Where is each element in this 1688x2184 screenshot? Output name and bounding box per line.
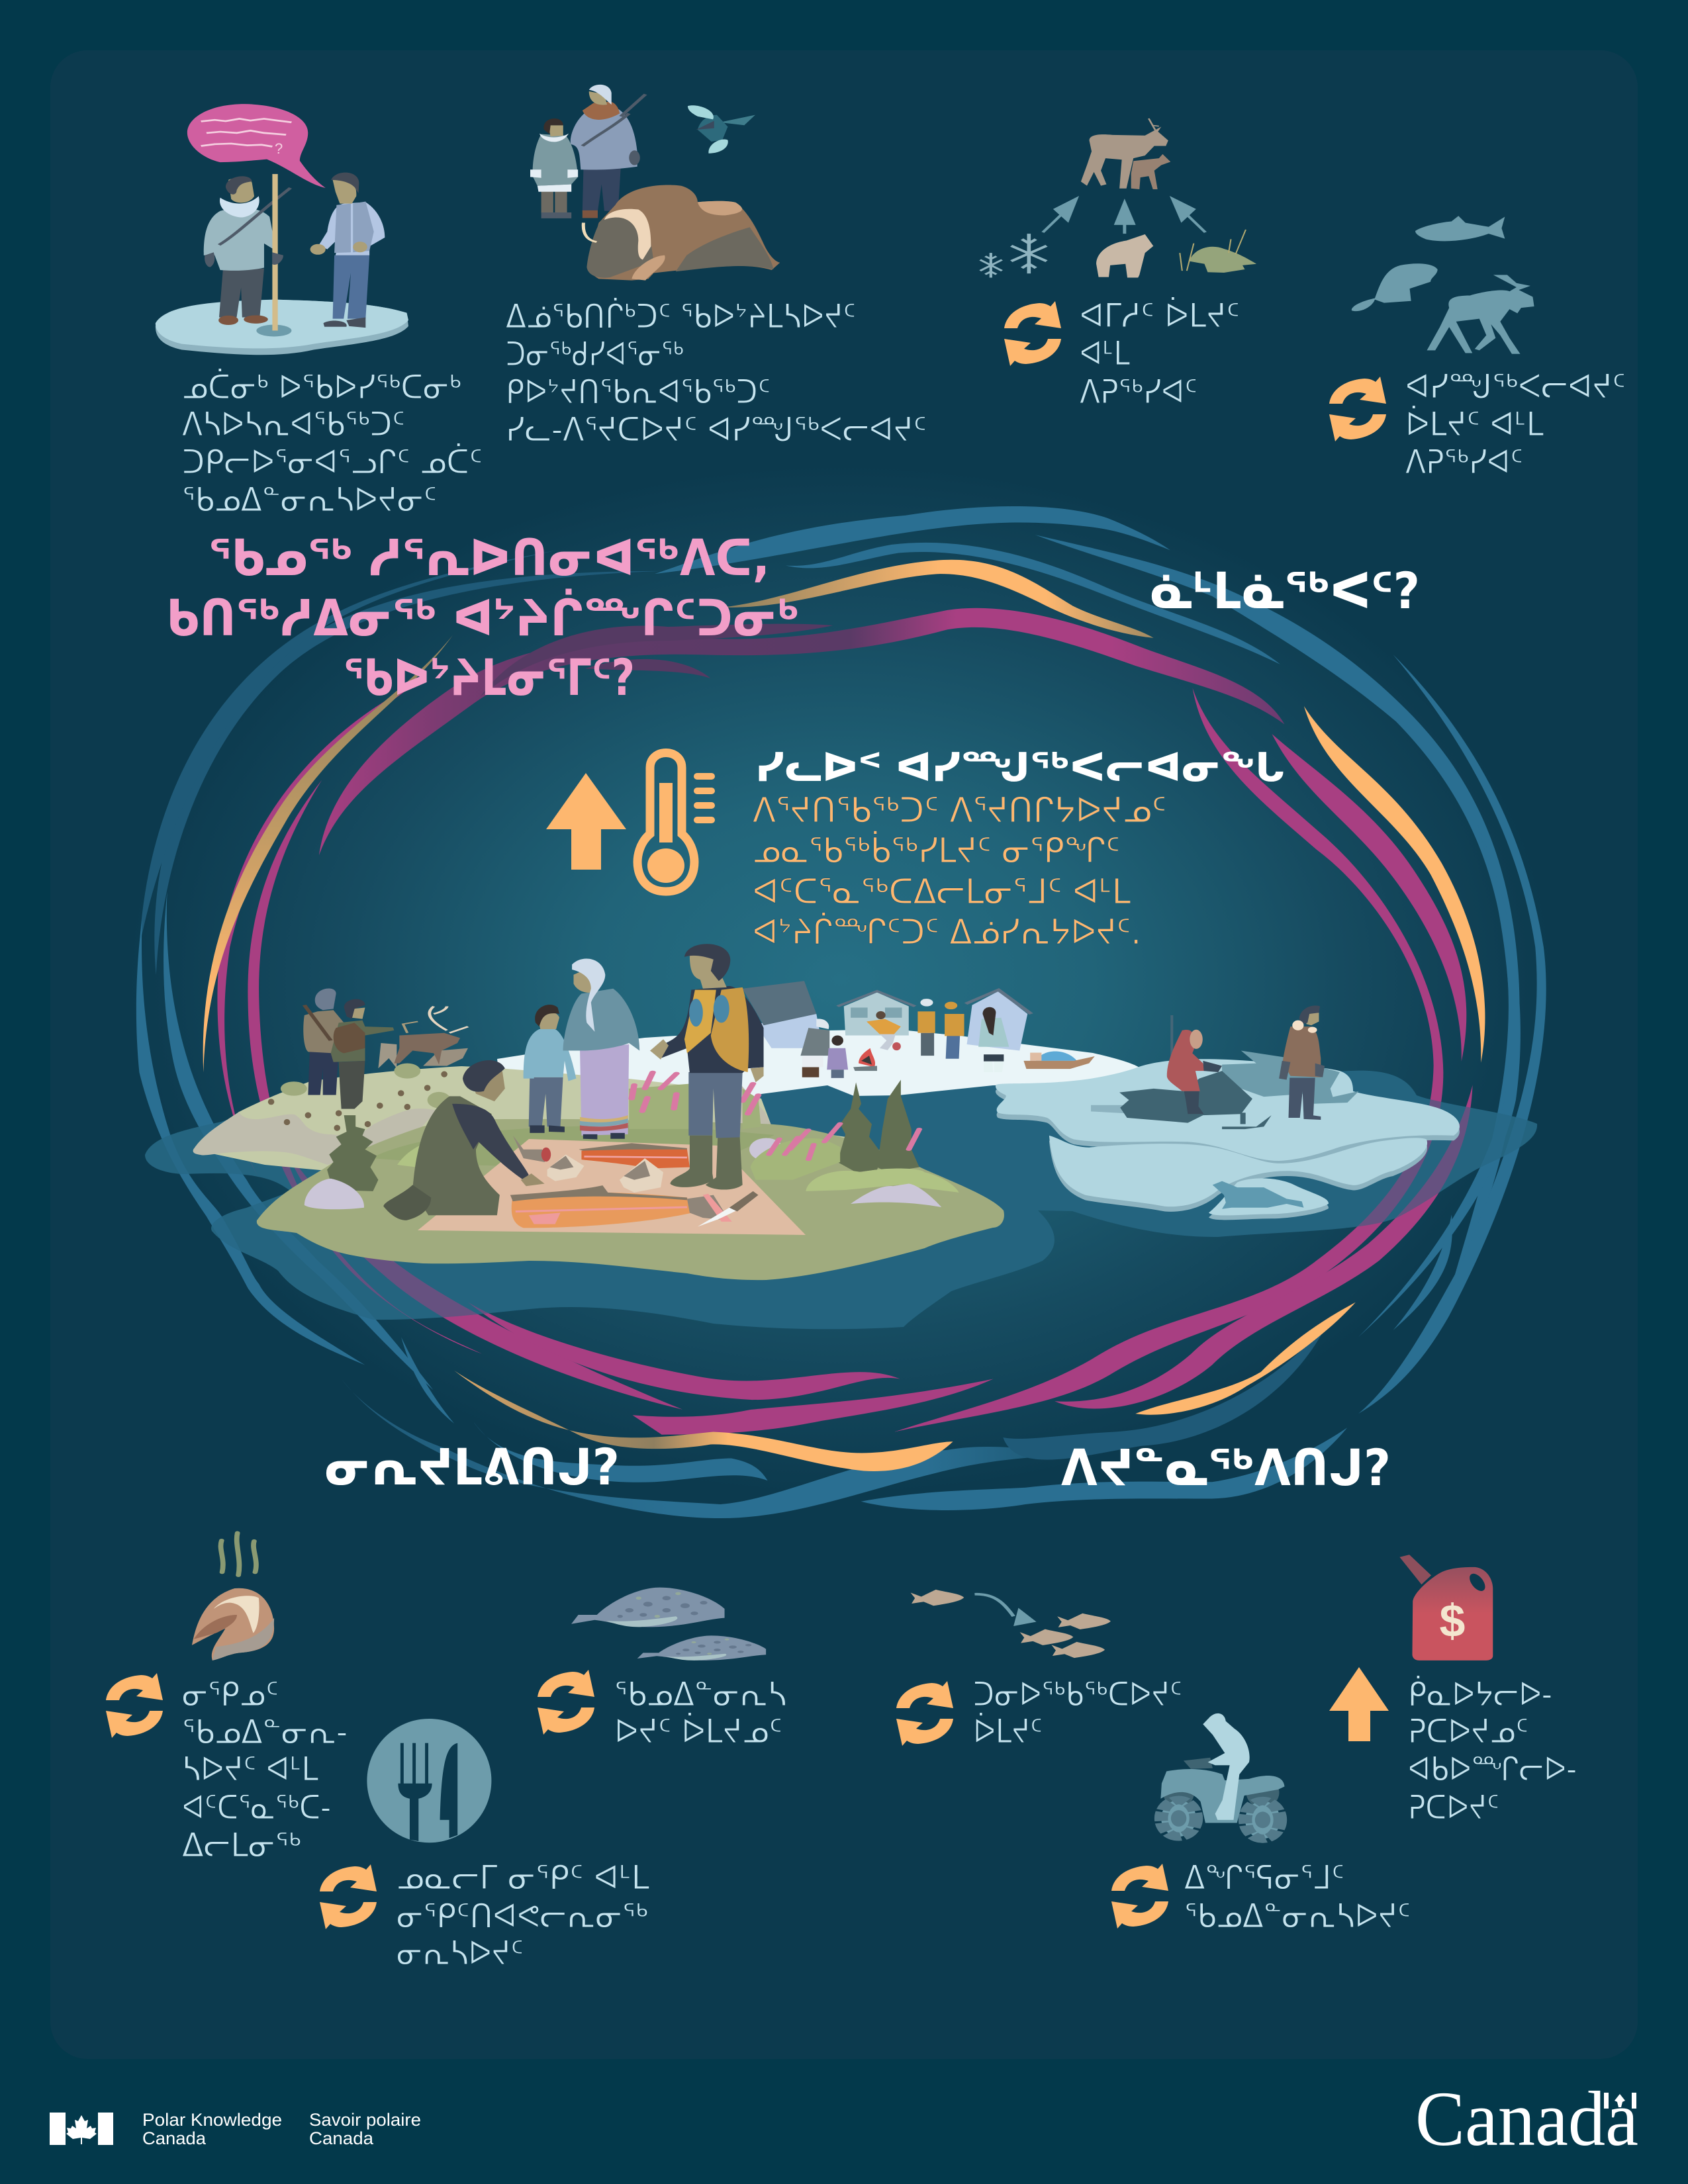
tree left (327, 1115, 378, 1191)
water (145, 1071, 1537, 1329)
text: food quality and safety: ᓂᕿᓄᑦ (182, 1675, 279, 1713)
wolf (1096, 234, 1153, 277)
text: food quality and safety: ᐃᓕᒪᓂᖅ (182, 1826, 301, 1864)
snow bank (497, 1029, 1142, 1112)
text: Inuit knowledge (506, 296, 927, 449)
icon: cycle (538, 1670, 594, 1735)
tracks and tufts (268, 1071, 447, 1131)
flag symbol (50, 2113, 113, 2145)
footer: Polar Knowledge signature (50, 2110, 421, 2148)
text: travel: ᖃᓄᐃᓐᓂᕆᓴᐅᔪᑦ (1184, 1897, 1411, 1935)
light green bushes (806, 1168, 959, 1193)
icon: cycle (1329, 377, 1386, 441)
text: Inuit knowledge: ᓯᓚ-ᐱᕐᔪᑕᐅᔪᑦ ᐊᓯᙳᖅᐸᓕᐊᔪᑦ (506, 410, 927, 449)
text: local food: ᓄᓇᓕᒥ ᓂᕿᑦ ᐊᒻᒪ (397, 1858, 649, 1897)
panel: access (896, 1555, 1577, 1935)
bushes back (281, 1064, 451, 1108)
text: many animals and plants (1080, 295, 1240, 411)
text: Inuit knowledge: ᑭᐅᔾᔪᑎᖃᕆᐊᖃᖅᑐᑦ (506, 373, 771, 411)
heading: pink question: ᑲᑎᖅᓱᐃᓂᖅ ᐊᔾᔨᒌᙱᑦᑐᓂᒃ (166, 588, 800, 647)
text: local food (397, 1858, 649, 1972)
snowflakes (980, 234, 1047, 277)
icon: cooked meat with steam (192, 1533, 274, 1661)
back land (193, 1066, 854, 1171)
dollar sign: $ (1440, 1595, 1465, 1647)
icon: plate with fork and knife (367, 1719, 491, 1843)
text: Inuit knowledge: ᑐᓂᖅᑯᓯᐊᕐᓂᖅ (506, 335, 684, 373)
question mark in bubble: ? (275, 140, 283, 157)
right trees (837, 1080, 919, 1172)
village houses (743, 981, 1031, 1051)
text: costs: ᕈᑕᐅᔪᑦ (1408, 1788, 1499, 1827)
ice pan (156, 300, 408, 355)
text: changing animals and plants: ᐊᓯᙳᖅᐸᓕᐊᔪᑦ (1405, 367, 1626, 406)
signature text: Canada (142, 2128, 207, 2148)
lighter meadow (371, 1125, 774, 1171)
rock left (305, 1179, 364, 1209)
salmon silhouette (1415, 216, 1505, 241)
text: climate change body: ᐊᔾᔨᒌᙱᑦᑐᑦ ᐃᓅᓯᕆᔭᐅᔪᑦ. (753, 911, 1141, 952)
text: many animals and plants: ᐱᕈᖅᓯᐊᑦ (1080, 373, 1197, 411)
icon: cycle (320, 1864, 377, 1929)
heading: pink question (166, 528, 800, 707)
text: migrating animals (973, 1675, 1182, 1751)
icon: fuel can (1399, 1555, 1493, 1661)
panel: new knowledge, ice scene (156, 85, 927, 519)
panel: food quality (106, 1533, 786, 1972)
heading: do you want it: ᓂᕆᔪᒪᕕᑎᒍ? (324, 1437, 620, 1496)
heading: can you get it: ᐱᔪᓐᓇᖅᐱᑎᒍ? (1061, 1438, 1391, 1497)
icon: cycle (896, 1681, 953, 1746)
text: travel (1184, 1858, 1411, 1935)
text: food quality and safety: ᓴᐅᔪᑦ ᐊᒻᒪ (182, 1750, 318, 1788)
signature text: Polar Knowledge (142, 2110, 282, 2130)
main island (257, 1119, 1004, 1280)
text: migrating animals: ᑐᓂᐅᖅᑲᖅᑕᐅᔪᑦ (973, 1675, 1182, 1713)
signature text: Savoir polaire (309, 2110, 421, 2130)
rock behind fireweed (749, 1138, 783, 1161)
heading: is it safe: ᓈᒻᒪᓈᖅᐸᑦ? (1150, 561, 1420, 620)
text: migrating animals: ᐆᒪᔪᑦ (973, 1711, 1043, 1751)
icon: up arrow (1329, 1667, 1389, 1741)
icon: ATV rider (1160, 1713, 1285, 1839)
bright grass patch (397, 1138, 450, 1168)
icon: thermometer (637, 753, 715, 891)
text: changing animals and plants (1405, 367, 1626, 481)
signature text (142, 2110, 421, 2148)
text: food quality and safety: ᖃᓄᐃᓐᓂᕆ- (182, 1713, 348, 1751)
text: costs (1408, 1674, 1577, 1827)
heading: pink question: ᖃᓄᖅ ᓱᕐᕆᐅᑎᓂᐊᖅᐱᑕ, (209, 528, 770, 587)
text: animal health (614, 1675, 786, 1751)
man in vest (650, 944, 764, 1190)
text: many animals and plants: ᐊᒥᓱᑦ ᐆᒪᔪᑦ (1080, 295, 1240, 335)
man in vest on ice (310, 173, 385, 328)
fireweed right (751, 1124, 919, 1180)
standing man in brown parka (1279, 1005, 1325, 1120)
beige shore right (728, 1085, 854, 1142)
text: new words: ᖃᓄᐃᓐᓂᕆᓴᐅᔪᓂᑦ (182, 480, 437, 519)
lower ice floe (1049, 1136, 1427, 1212)
text: many animals and plants: ᐊᒻᒪ (1080, 334, 1130, 373)
background snowmobile (1222, 1051, 1359, 1104)
text: Inuit knowledge: ᐃᓅᖃᑎᒌᒃᑐᑦ ᖃᐅᔾᔨᒪᓴᐅᔪᑦ (506, 296, 856, 336)
text: costs: ᐊᑲᐅᙱᓕᐅ- (1408, 1750, 1577, 1788)
text: local food: ᓂᕆᓴᐅᔪᑦ (397, 1934, 524, 1972)
icon: fish migration (911, 1590, 1111, 1658)
child (530, 118, 578, 218)
text: climate change body (753, 791, 1166, 952)
muskox (583, 185, 780, 281)
arrows up to caribou (1043, 196, 1205, 234)
boy (524, 1005, 576, 1133)
icon: cycle (1111, 1864, 1168, 1929)
text: animal health: ᐅᔪᑦ ᐆᒪᔪᓄᑦ (614, 1711, 782, 1751)
fish on tarp (510, 1136, 759, 1228)
text: new words: ᓄᑖᓂᒃ ᐅᖃᐅᓯᖅᑕᓂᒃ (182, 367, 461, 406)
boat sled (1023, 1051, 1095, 1069)
text: new words: ᑐᑭᓕᐅᕐᓂᐊᕐᓗᒋᑦ ᓄᑖᑦ (182, 442, 483, 481)
villagers (800, 999, 1009, 1078)
ribbons seen through water (162, 1099, 1527, 1320)
kneeling man (383, 1060, 545, 1220)
speech bubble (187, 104, 326, 188)
seal floe and seal (1209, 1178, 1329, 1220)
text: travel: ᐃᖏᕐᕋᓂᕐᒧᑦ (1184, 1858, 1344, 1897)
text: new words (182, 367, 483, 519)
text: changing animals and plants: ᐱᕈᖅᓯᐊᑦ (1405, 443, 1523, 481)
icon: up arrow (546, 773, 626, 870)
text: climate change body: ᓄᓇᖃᖅᑳᖅᓯᒪᔪᑦ ᓂᕿᖏᑦ (753, 830, 1120, 871)
moss and grass (1180, 230, 1256, 273)
text: animal health: ᖃᓄᐃᓐᓂᕆᓴ (614, 1675, 786, 1713)
panel: wildlife and plants (980, 118, 1626, 481)
icon: seals (571, 1588, 766, 1661)
text: costs: ᑮᓇᐅᔭᓕᐅ- (1408, 1674, 1552, 1713)
moose silhouette (1427, 275, 1534, 354)
icon: cycle (106, 1673, 163, 1738)
beige shore left (193, 1109, 436, 1165)
aurora ribbons (136, 506, 1546, 1518)
upper ice floe (996, 1059, 1460, 1166)
hunters with caribou (303, 988, 468, 1109)
icon: cycle (1004, 301, 1061, 366)
heading: climate change: ᓯᓚᐅᑉ ᐊᓯᙳᖅᐸᓕᐊᓂᖓ (755, 745, 1285, 791)
text: food quality and safety (182, 1675, 348, 1864)
signature text: Canada (309, 2128, 374, 2148)
bird (688, 105, 755, 154)
text: changing animals and plants: ᐆᒪᔪᑦ ᐊᒻᒪ (1405, 404, 1544, 443)
ice, snowmobile, hunter (996, 1005, 1460, 1220)
text: food quality and safety: ᐊᑦᑕᕐᓇᖅᑕ- (182, 1788, 331, 1827)
text: climate change body: ᐱᕐᔪᑎᖃᖅᑐᑦ ᐱᕐᔪᑎᒋᔭᐅᔪᓄᑦ (753, 791, 1166, 831)
tarp (418, 1139, 806, 1235)
man with pole (204, 174, 291, 331)
central scene (145, 944, 1537, 1329)
heading: pink question: ᖃᐅᔾᔨᒪᓂᕐᒥᑦ? (344, 648, 635, 707)
illustrations traced over main scene (268, 944, 1031, 1228)
Canada wordmark: Canada (1415, 2075, 1638, 2162)
central glow (126, 463, 1556, 1496)
text: new words: ᐱᓴᐅᓴᕆᐊᖃᖅᑐᑦ (182, 405, 405, 443)
text: climate change body: ᐊᑦᑕᕐᓇᖅᑕᐃᓕᒪᓂᕐᒧᑦ ᐊᒻᒪ (753, 872, 1131, 912)
snowmobile rider (1091, 1015, 1272, 1129)
fireweed behind people (629, 1072, 761, 1129)
caribou (1081, 118, 1170, 189)
text: costs: ᕈᑕᐅᔪᓄᑦ (1408, 1712, 1528, 1751)
elder woman (563, 958, 639, 1139)
rock right (851, 1183, 941, 1207)
elder with rifle (571, 85, 645, 218)
text: local food: ᓂᕿᑦᑎᐊᕙᓕᕆᓂᖅ (397, 1897, 648, 1935)
beaver silhouette (1352, 263, 1438, 311)
